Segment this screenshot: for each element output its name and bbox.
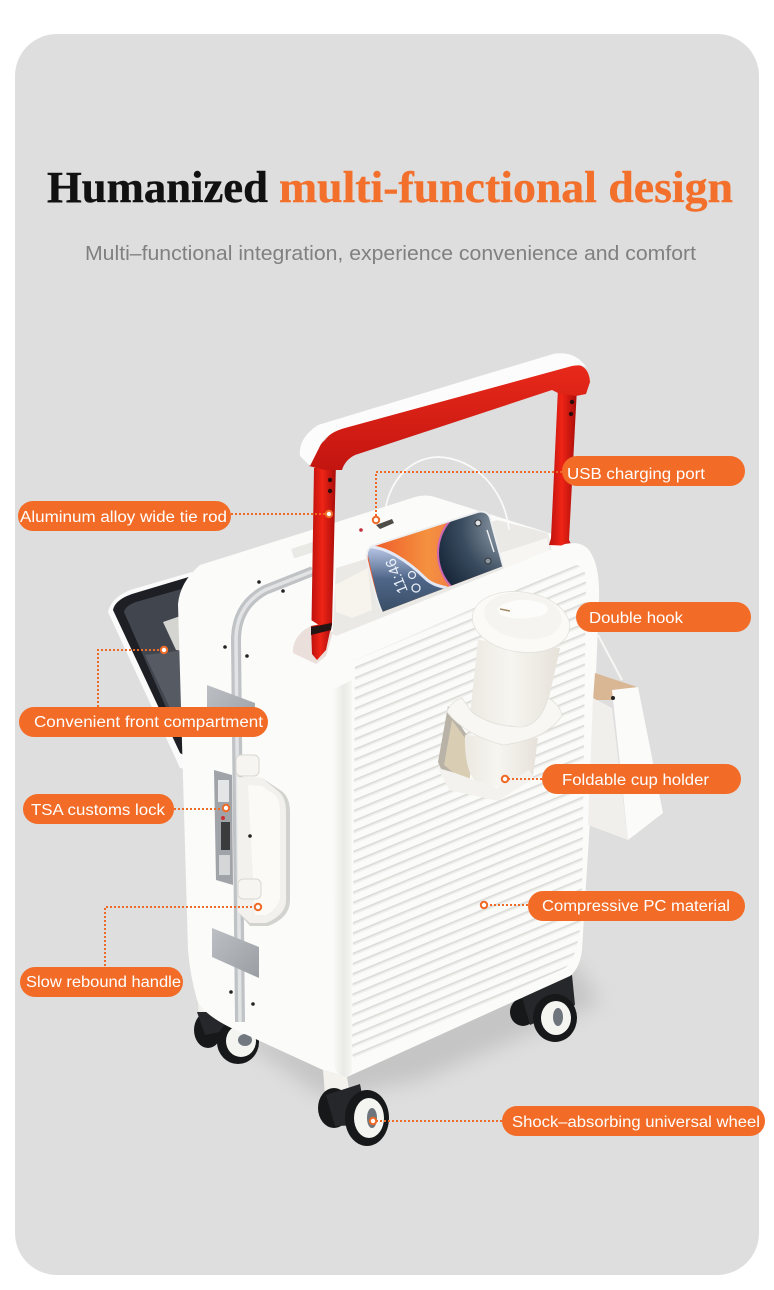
label: TSA customs lock bbox=[23, 794, 229, 824]
label: USB charging port: USB charging port bbox=[567, 466, 706, 483]
holder base bbox=[438, 768, 534, 801]
cup holder bbox=[438, 585, 574, 801]
label: slow rebound handle: Slow rebound handle bbox=[26, 974, 181, 991]
phone: 11:46 bbox=[382, 556, 412, 596]
label: foldable cup holder: Foldable cup holder bbox=[562, 772, 709, 789]
title: Humanized bbox=[47, 163, 268, 212]
suitcase side and top shell bbox=[178, 496, 570, 1077]
cup lower bbox=[465, 735, 538, 787]
red grip bbox=[309, 364, 590, 470]
label: compressive PC material: Compressive PC material bbox=[542, 898, 730, 915]
phone frame bbox=[367, 512, 503, 612]
top recess bbox=[332, 520, 552, 645]
telescopic handle bbox=[300, 353, 590, 660]
handle notch bbox=[293, 626, 333, 664]
label: foldable cup holder bbox=[502, 764, 741, 794]
side latch plates bbox=[207, 685, 259, 978]
rivets bbox=[223, 580, 285, 1006]
tray block bbox=[500, 538, 550, 570]
label: convenient front compartment: Convenient front compartment bbox=[34, 714, 264, 731]
right post bbox=[549, 388, 577, 546]
label: double hook: Double hook bbox=[589, 610, 683, 627]
label: convenient front compartment bbox=[19, 647, 268, 737]
lid bbox=[468, 585, 574, 659]
ribbed surface bbox=[352, 565, 586, 1058]
left post lower bbox=[311, 622, 332, 660]
phone tray items bbox=[335, 568, 372, 618]
label: shock-absorbing universal wheel bbox=[370, 1106, 765, 1136]
aluminium frame bbox=[236, 571, 313, 1022]
label: double hook bbox=[576, 602, 751, 632]
usb cable bbox=[384, 457, 509, 530]
shopping bag bbox=[588, 635, 663, 840]
label: aluminum alloy wide tie rod bbox=[18, 501, 332, 531]
ring bbox=[447, 698, 562, 745]
floor shadow bbox=[215, 960, 600, 1098]
label: shock-absorbing universal wheel: Shock–absorbing universal wheel bbox=[512, 1114, 760, 1131]
front compartment door bbox=[108, 572, 192, 770]
label: TSA customs lock: TSA customs lock bbox=[31, 802, 165, 819]
suitcase illustration bbox=[108, 353, 663, 1146]
label: slow rebound handle bbox=[20, 904, 261, 997]
bracket bbox=[438, 706, 470, 790]
TSA lock bbox=[214, 770, 233, 885]
front shell bbox=[286, 543, 599, 1077]
phone bbox=[368, 512, 503, 612]
label: aluminum alloy wide tie rod: Aluminum alloy wide tie rod bbox=[20, 509, 227, 526]
title: multi-functional design bbox=[279, 163, 733, 212]
front wheel bbox=[318, 1070, 389, 1146]
label: compressive PC material bbox=[481, 891, 745, 921]
top buttons bbox=[291, 519, 394, 558]
subtitle: Multi–functional integration, experience convenience and comfort bbox=[85, 242, 696, 265]
back wheels bbox=[194, 975, 577, 1064]
cup body bbox=[470, 640, 560, 726]
side handle bbox=[236, 755, 290, 926]
white grip top bbox=[300, 353, 587, 466]
left post bbox=[311, 462, 336, 660]
title bbox=[47, 163, 733, 212]
label: USB charging port bbox=[373, 456, 745, 523]
corner shading bbox=[332, 680, 352, 1077]
